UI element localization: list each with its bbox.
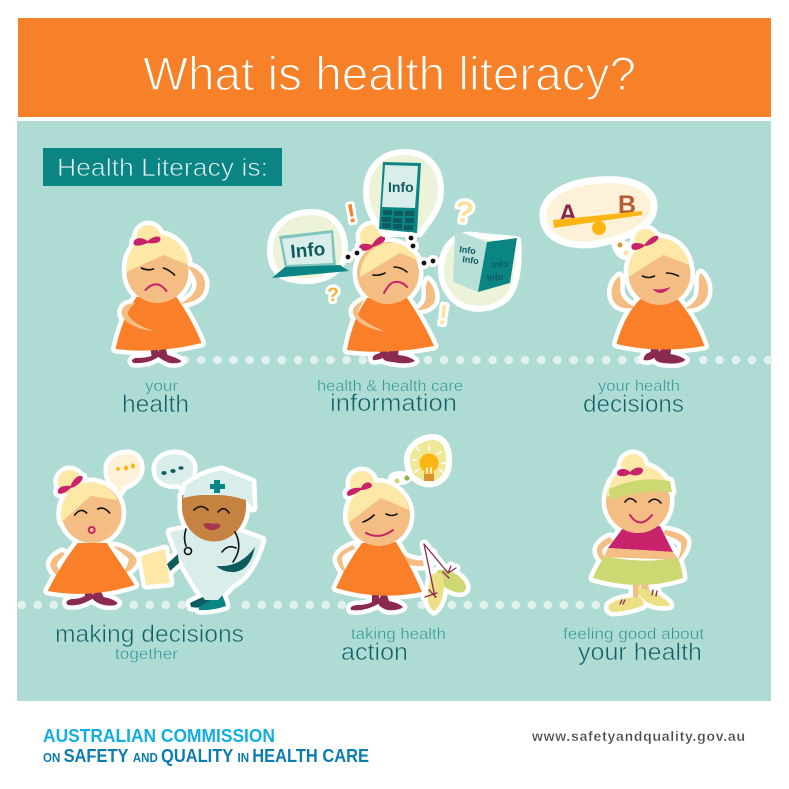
thought bubble: book: Info: [459, 244, 477, 256]
thought bubble: book: Info: [491, 259, 509, 270]
character: girl, taking action: [336, 471, 433, 610]
character: nurse: [141, 470, 262, 610]
character: girl, your health: [116, 225, 205, 363]
connector dots to thought bubbles: [342, 232, 439, 269]
caption: taking health action: taking health: [351, 626, 446, 643]
caption: making decisions together: [55, 621, 244, 663]
punctuation marks: exclamation and question: !: [437, 299, 450, 331]
caption: feeling good about your health: [563, 626, 705, 666]
character: girl, making decisions: [48, 470, 137, 606]
heading: Health Literacy is: [43, 148, 282, 186]
caption: taking health action: action: [341, 639, 408, 666]
caption: health and health care information: health & health care: [317, 378, 463, 395]
title banner: What is health literacy?: [143, 47, 636, 100]
thought bubble: laptop: [270, 212, 349, 281]
footer logo: Australian Commission: ON SAFETY AND QUALITY IN HEALTH CARE: [43, 745, 369, 766]
caption: feeling good about your health: feeling good about: [563, 626, 705, 643]
thought bubble: book: Info: [486, 272, 504, 283]
character: girl, information: [347, 225, 435, 363]
punctuation marks: exclamation and question: [327, 195, 476, 331]
punctuation marks: exclamation and question: !: [345, 198, 358, 229]
footer website address: www.safetyandquality.gov.au: [531, 728, 745, 744]
icon: shoes tied with laces: [424, 544, 470, 611]
footer logo: Australian Commission: [43, 725, 369, 766]
character: girl, feeling good: [593, 454, 687, 612]
caption: your health decisions: [583, 378, 684, 418]
thought bubble: A or B seesaw: B: [618, 191, 636, 219]
punctuation marks: exclamation and question: ?: [453, 195, 476, 230]
caption: your health decisions: your health: [598, 378, 680, 395]
thought bubble: laptop: Info: [290, 239, 326, 263]
speech bubble: girl: [108, 454, 140, 495]
speech bubble: nurse: [156, 454, 193, 490]
thought bubble: book: [441, 230, 519, 309]
footer logo: Australian Commission: AUSTRALIAN COMMISSION: [43, 725, 275, 746]
dotted line: top row: [181, 356, 772, 364]
caption: making decisions together: together: [115, 646, 178, 663]
punctuation marks: exclamation and question: ?: [327, 285, 339, 306]
character: girl, decisions: [612, 229, 708, 364]
caption: health and health care information: [317, 378, 463, 417]
title banner: [18, 18, 771, 117]
thought bubble: phone: [366, 152, 441, 234]
caption: your health: [122, 378, 189, 418]
thought bubble: light bulb: [388, 437, 449, 485]
caption: your health: health: [122, 391, 189, 418]
caption: health and health care information: information: [330, 390, 457, 417]
thought bubble: book: Info: [462, 254, 480, 266]
dotted line: bottom row: [17, 601, 662, 609]
caption: your health: your: [145, 378, 178, 395]
caption: taking health action: [341, 626, 446, 666]
caption: feeling good about your health: your health: [578, 639, 702, 666]
caption: making decisions together: making decisions: [55, 621, 244, 648]
caption: your health decisions: decisions: [583, 391, 684, 418]
teal panel background: [17, 121, 771, 701]
thought bubble: A or B seesaw: [543, 180, 654, 260]
thought bubble: A or B seesaw: A: [559, 200, 577, 228]
thought bubble: phone: Info: [388, 179, 414, 195]
heading: Health Literacy is: Health Literacy is:: [57, 154, 268, 182]
